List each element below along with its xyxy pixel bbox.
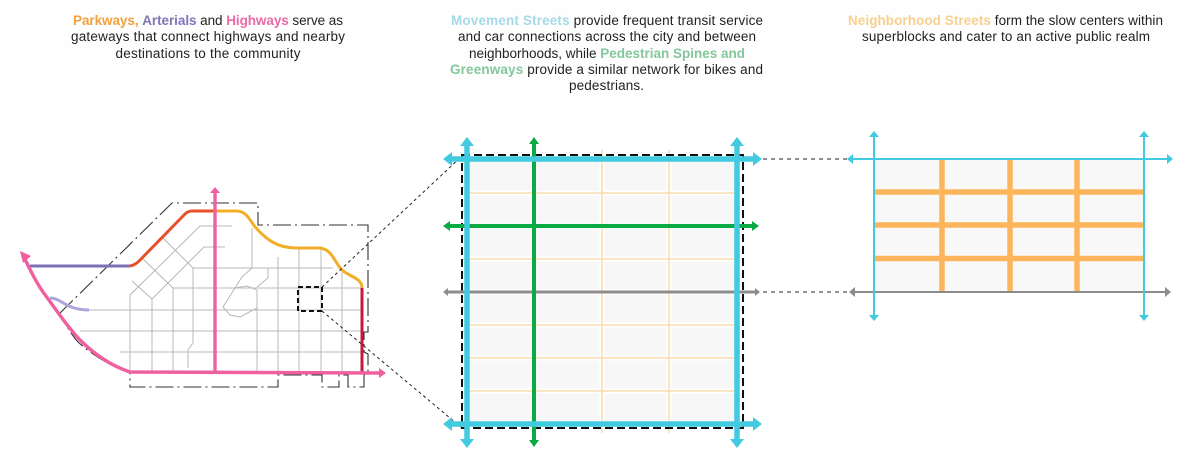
connector lines to detail	[763, 159, 850, 292]
parkway: red-orange segment	[130, 211, 215, 266]
panel: movement streets caption	[438, 5, 776, 105]
panel: movement streets caption: pedestrians.	[569, 78, 644, 93]
arterial street	[30, 264, 130, 268]
zoom locator square	[298, 287, 322, 311]
panel: movement streets caption: and car connections across the city and between	[458, 29, 756, 44]
panel: parkways caption: Parkways, Arterials and Highways serve as	[73, 13, 343, 28]
panel: parkways caption: gateways that connect highways and nearby	[71, 29, 345, 44]
city blocks	[875, 160, 1144, 292]
grey street	[852, 291, 1168, 293]
panel: neighborhood streets caption	[838, 5, 1170, 75]
panel: movement streets caption: Movement Streets provide frequent transit service	[451, 13, 763, 28]
panel: movement streets caption: Greenways provide a similar network for bikes and	[450, 62, 763, 77]
parkway: yellow segment	[215, 211, 362, 288]
panel: parkways caption: destinations to the community	[116, 46, 301, 61]
crimson connector	[360, 288, 364, 372]
neighborhood streets	[875, 159, 1144, 292]
study area dashed boundary	[462, 155, 743, 428]
city blocks	[468, 160, 736, 424]
movement streets	[449, 143, 756, 442]
secondary arterial	[50, 298, 89, 310]
panel: movement streets caption: neighborhoods, while Pedestrian Spines and	[469, 46, 745, 61]
panel: neighborhood streets caption: superblocks and cater to an active public realm	[862, 29, 1150, 44]
panel: neighborhood streets caption: Neighborhood Streets form the slow centers within	[848, 13, 1163, 28]
zoom connector lines	[322, 156, 462, 428]
grey street	[446, 290, 756, 294]
neighborhood street grid	[469, 150, 735, 433]
chart: city street network map	[20, 156, 462, 428]
highways	[23, 192, 380, 373]
highway arrowheads	[20, 187, 386, 378]
pedestrian spines and greenways	[448, 142, 754, 442]
map boundary	[60, 203, 368, 387]
panel: parkways caption	[37, 5, 380, 75]
block gutters	[469, 150, 735, 433]
chart: neighborhood streets detail	[847, 131, 1173, 321]
local street grid	[80, 226, 362, 373]
movement streets	[850, 135, 1170, 317]
chart: superblock street network	[443, 137, 762, 448]
